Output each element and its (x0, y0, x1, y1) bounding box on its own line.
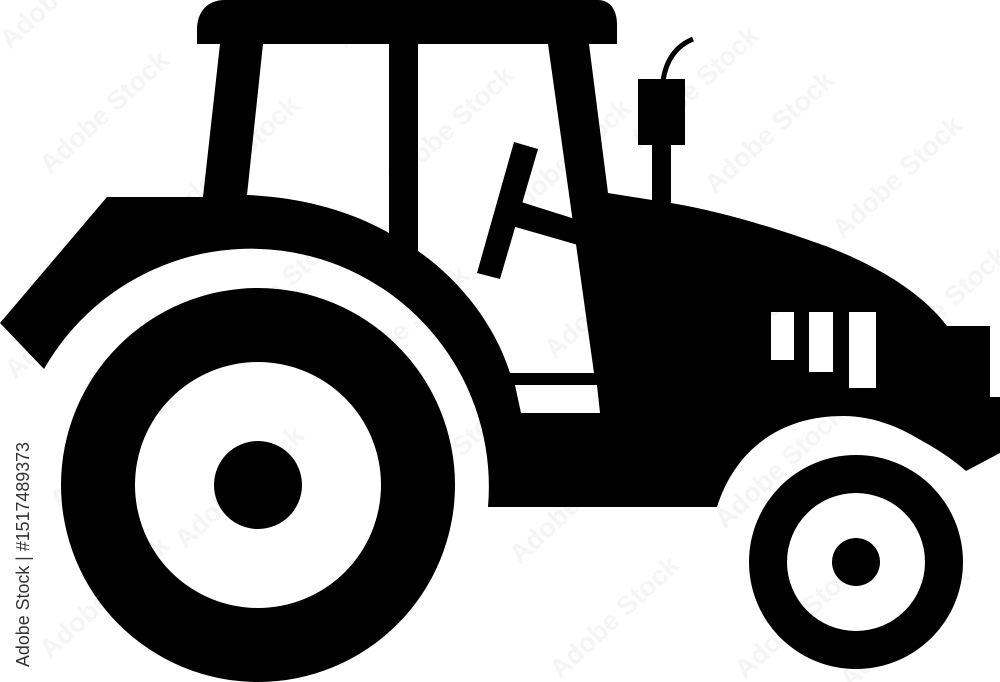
watermark pattern: Adobe Stock (169, 419, 310, 554)
watermark pattern: Adobe Stock (209, 219, 350, 354)
watermark pattern: Adobe Stock (709, 399, 850, 534)
watermark pattern: Adobe Stock (699, 64, 840, 199)
watermark pattern: Adobe Stock (729, 549, 870, 682)
watermark pattern: Adobe Stock (379, 389, 520, 524)
steering wheel (477, 142, 538, 279)
right cab window (418, 44, 594, 373)
left cab window (247, 44, 389, 233)
watermark pattern: Adobe Stock (827, 109, 968, 244)
front wheel (749, 455, 963, 669)
watermark pattern: Adobe Stock (669, 269, 810, 404)
floor step (515, 385, 600, 413)
hood vents (771, 312, 876, 388)
watermark pattern: Adobe Stock (539, 229, 680, 364)
watermark pattern: Adobe Stock (34, 44, 175, 179)
tractor body and cab silhouette (0, 0, 1000, 507)
exhaust pipe tip (663, 39, 693, 81)
watermark pattern: Adobe Stock (379, 59, 520, 194)
stock image id label: Adobe Stock | #1517489373 (13, 442, 33, 667)
rear wheel (61, 288, 455, 682)
watermark pattern: Adobe Stock (496, 92, 637, 227)
watermark pattern: Adobe Stock (34, 529, 175, 664)
watermark pattern: Adobe Stock (624, 19, 765, 154)
watermark pattern: Adobe Stock (334, 259, 475, 394)
watermark pattern: Adobe Stock (164, 89, 305, 224)
watermark pattern: Adobe Stock (0, 249, 140, 384)
watermark pattern: Adobe Stock (544, 549, 685, 682)
watermark pattern: Adobe Stock (44, 379, 185, 514)
steering column (512, 201, 578, 245)
watermark pattern: Adobe Stock (504, 434, 645, 569)
